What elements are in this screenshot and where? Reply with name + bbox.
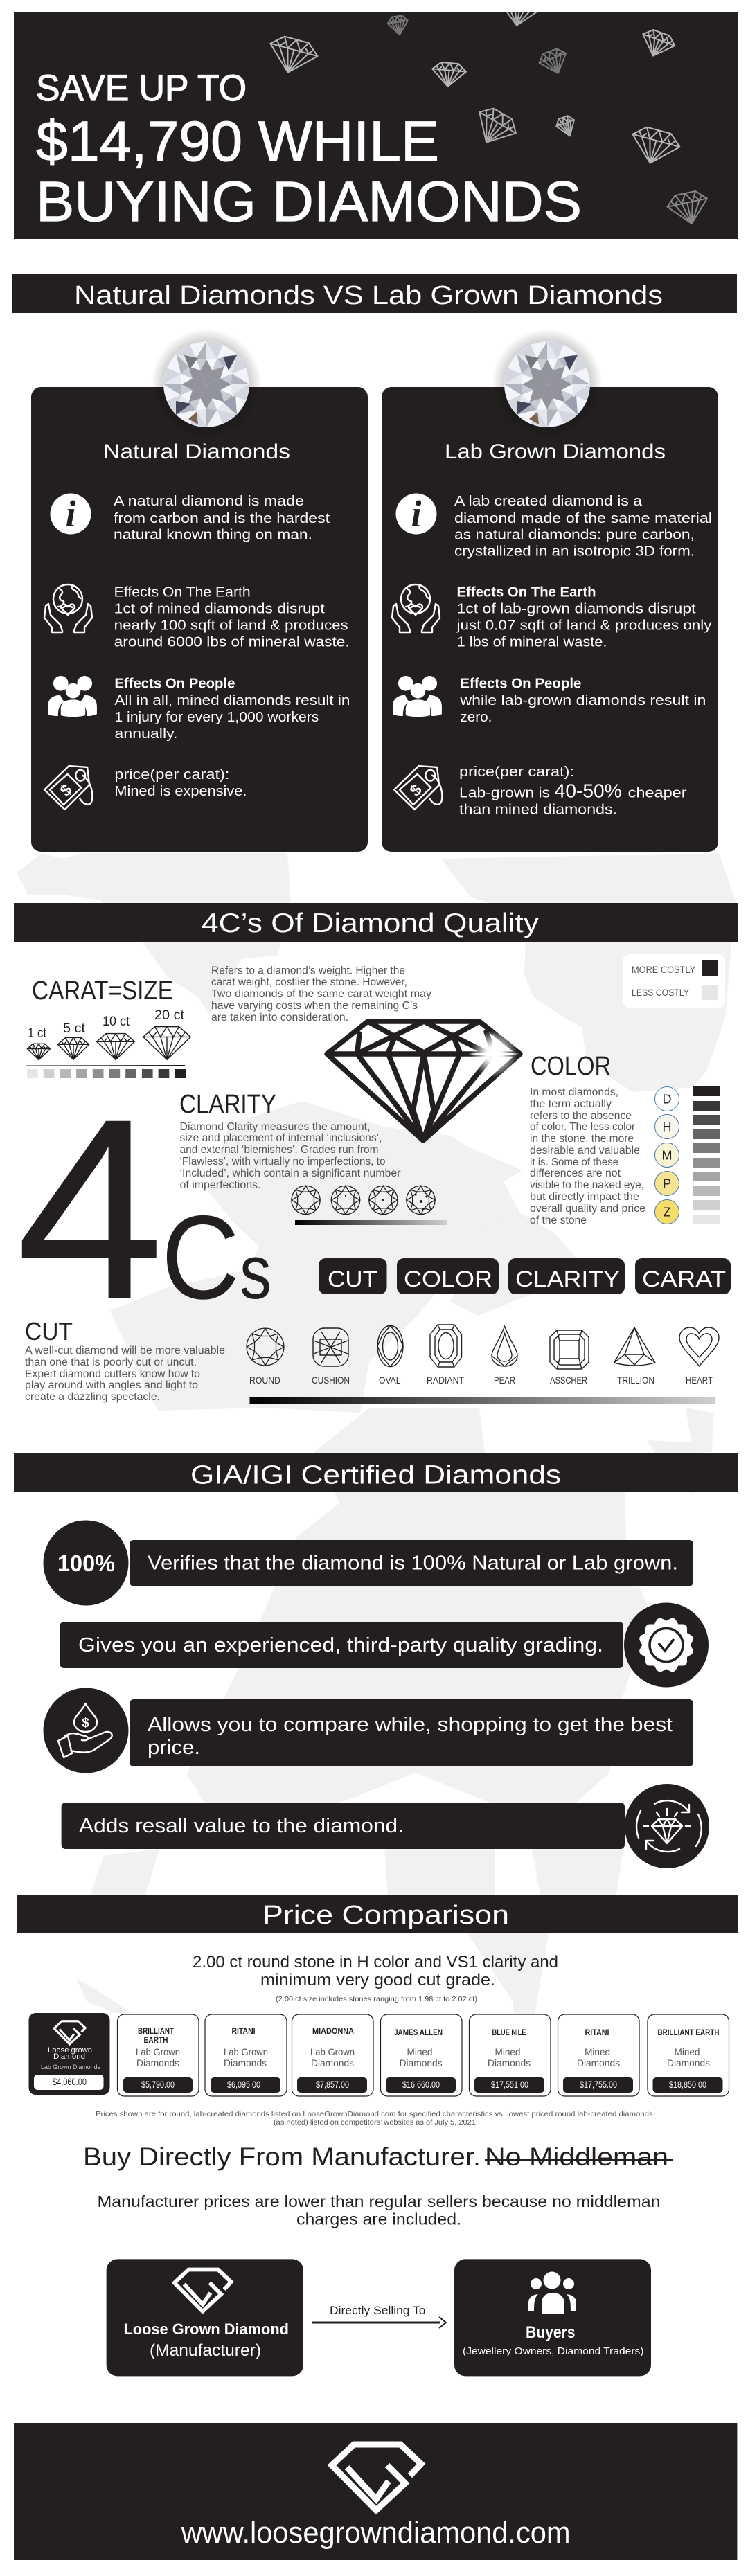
text: price natural: price(per carat): <box>114 767 229 782</box>
text: comparison subject <box>193 1953 558 2003</box>
clarity grade diamonds <box>292 1186 435 1215</box>
text: comparison subject: 2.00 ct round stone in H color and VS1 clarity and <box>193 1953 558 1971</box>
color grade letters <box>662 1093 672 1219</box>
carat block <box>26 976 190 1078</box>
carat size labels: 5 ct <box>63 1021 86 1036</box>
benefit row 4: Adds resall value to the diamond. <box>79 1815 404 1837</box>
title <box>36 68 582 233</box>
text: comparison subject: (2.00 ct size includes stones ranging from 1.98 ct to 2.02 ct) <box>276 1995 477 2003</box>
pills: four C labels: CUT <box>328 1267 377 1291</box>
text: price lab: price(per carat): <box>459 764 574 780</box>
price card: Brilliant Earth lab: BRILLIANT <box>138 2026 175 2036</box>
price card: Brilliant Earth mined: $18,850.00 <box>669 2079 706 2090</box>
text: people effects natural: 1 injury for every 1,000 workers <box>114 710 319 725</box>
background world map <box>17 853 736 2096</box>
benefit row 1: Verifies that the diamond is 100% Natural or Lab grown. <box>148 1553 678 1575</box>
pills: four C labels: CARAT <box>642 1267 726 1291</box>
benefit row 3 <box>43 1688 693 1773</box>
cut shape labels <box>249 1375 713 1386</box>
pills: four C labels <box>319 1258 731 1294</box>
icon: info: i <box>65 493 76 535</box>
icon: info right: i <box>411 493 422 535</box>
text: people effects lab <box>459 676 706 725</box>
text: lab definition: crystallized in an isotropic 3D form. <box>454 544 695 559</box>
cut shape labels: PEAR <box>494 1375 515 1386</box>
price card: Miadonna lab: Diamonds <box>311 2057 354 2068</box>
text: price natural: Mined is expensive. <box>114 784 247 799</box>
text: natural definition: from carbon and is the hardest <box>114 511 330 526</box>
text: earth effects lab: just 0.07 sqft of land & produces only <box>456 618 712 633</box>
heading: buy directly <box>83 2143 673 2171</box>
price card: Blue Nile mined: $17,551.00 <box>491 2079 528 2090</box>
text: earth effects natural: Effects On The Earth <box>114 585 251 600</box>
sparkle <box>468 1030 519 1077</box>
clarity heading: CLARITY <box>179 1090 276 1119</box>
large diamond illustration <box>327 1021 520 1141</box>
section heading: GIA IGI: GIA/IGI Certified Diamonds <box>190 1461 561 1490</box>
cut shape labels: ASSCHER <box>550 1375 587 1386</box>
icon: info <box>50 493 91 535</box>
clarity block <box>179 1090 447 1225</box>
icon: price tag right <box>394 766 442 810</box>
big 4Cs lettering: s <box>240 1230 271 1315</box>
big 4Cs lettering <box>16 1065 271 1352</box>
header banner <box>14 0 738 239</box>
text: color description: visible to the naked eye, <box>530 1179 644 1191</box>
text: clarity description <box>180 1121 400 1191</box>
color grade letters: H <box>662 1120 672 1134</box>
text: price lab: than mined diamonds. <box>459 802 617 817</box>
price card: Brilliant Earth lab: EARTH <box>144 2035 168 2045</box>
text: color description: but directly impact the <box>530 1191 639 1203</box>
decorative falling diamonds <box>265 0 711 228</box>
icon: price tag <box>44 766 92 810</box>
legend: cost: MORE COSTLY <box>632 964 696 975</box>
price card: Brilliant Earth mined: BRILLIANT EARTH <box>658 2028 719 2037</box>
price card: Brilliant Earth mined: Diamonds <box>667 2057 710 2068</box>
title: BUYING DIAMONDS <box>36 170 582 233</box>
text: earth effects lab: 1 lbs of mineral waste. <box>457 635 607 650</box>
price card: Ritani lab: Lab Grown <box>224 2046 268 2057</box>
price card: Ritani mined: Mined <box>585 2046 610 2057</box>
price card: James Allen mined: JAMES ALLEN <box>394 2028 443 2037</box>
text: clarity description: of imperfections. <box>180 1179 260 1191</box>
price card: Ritani mined <box>558 2014 639 2096</box>
icon: hand with money drop <box>43 1688 129 1773</box>
text: people effects natural: All in all, mined diamonds result in <box>114 693 350 708</box>
price card: Brilliant Earth lab: Diamonds <box>136 2057 179 2068</box>
text: cut description: A well-cut diamond will be more valuable <box>25 1345 225 1357</box>
price card: Ritani mined: $17,755.00 <box>580 2079 617 2090</box>
panel: lab grown diamonds <box>382 329 718 852</box>
text: people effects lab: while lab-grown diamonds result in <box>459 693 706 708</box>
cut shapes <box>247 1325 719 1369</box>
carat size labels: 20 ct <box>154 1008 185 1023</box>
icon: people right <box>393 676 442 717</box>
panel: buyers: (Jewellery Owners, Diamond Traders) <box>463 2345 644 2357</box>
text: price lab <box>459 764 687 817</box>
text: color description: overall quality and price <box>530 1203 645 1215</box>
text: carat description: Refers to a diamond’s weight. Higher the <box>211 965 405 977</box>
benefit row 3: price. <box>148 1737 200 1759</box>
benefit row 2 <box>60 1602 709 1687</box>
text: color description: of the stone <box>530 1215 587 1226</box>
website url: www.loosegrowndiamond.com <box>181 2516 571 2550</box>
text: earth effects lab <box>456 585 712 650</box>
text: earth effects lab: Effects On The Earth <box>457 585 596 600</box>
text: color description: In most diamonds, <box>530 1086 618 1098</box>
text: people effects natural: Effects On People <box>114 676 235 691</box>
icon: earth in hands right <box>392 584 440 632</box>
section heading: natural vs lab: Natural Diamonds VS Lab Grown Diamonds <box>74 281 663 310</box>
panel: natural diamonds <box>31 329 368 852</box>
text: price lab: cheaper <box>628 786 687 801</box>
footnote: Prices shown are for round, lab-created diamonds listed on LooseGrownDiamond.com for specified characteristics vs. lowest priced round lab-created diamonds <box>96 2111 653 2118</box>
cut shape labels: ROUND <box>249 1375 280 1386</box>
price card: Miadonna lab: $7,857.00 <box>316 2079 349 2090</box>
icon: hand with money drop: $ <box>82 1716 89 1730</box>
text: color description: desirable and valuable <box>530 1145 640 1156</box>
benefit row 2: Gives you an experienced, third-party quality grading. <box>78 1634 603 1656</box>
text: carat description <box>211 965 431 1023</box>
text: people effects lab: zero. <box>460 710 492 725</box>
icon: buyers group <box>528 2271 576 2314</box>
benefit row 1 <box>43 1521 693 1605</box>
title: SAVE UP TO <box>36 68 247 109</box>
cut shape labels: TRILLION <box>617 1375 654 1386</box>
cut shape labels: RADIANT <box>427 1375 464 1386</box>
carat heading: CARAT=SIZE <box>32 976 173 1005</box>
carat size labels: 1 ct <box>28 1026 47 1041</box>
cut block <box>25 1317 719 1404</box>
panel: manufacturer <box>107 2259 303 2376</box>
color grade letters: D <box>662 1093 672 1107</box>
big 4Cs lettering: 4 <box>16 1065 164 1352</box>
section heading: 4Cs <box>14 903 738 942</box>
text: manufacturer explanation <box>97 2192 661 2228</box>
text: color description: in the stone, the more <box>530 1133 634 1145</box>
text: people effects lab: Effects On People <box>460 676 581 691</box>
price card: Ritani lab <box>205 2014 287 2096</box>
text: comparison subject: minimum very good cut grade. <box>260 1971 495 1989</box>
price card: Ritani lab: Diamonds <box>224 2057 267 2068</box>
heading: buy directly: Buy Directly From Manufacturer. <box>83 2143 481 2171</box>
text: price lab: Lab-grown is <box>459 786 550 801</box>
text: lab definition <box>454 494 712 559</box>
text: natural definition: A natural diamond is made <box>114 494 304 509</box>
price card: Blue Nile mined: Diamonds <box>488 2057 531 2068</box>
text: cut description: create a dazzling spectacle. <box>25 1391 160 1403</box>
heading: buy directly: No Middleman <box>485 2143 668 2171</box>
price card: James Allen mined <box>381 2014 462 2096</box>
logo small <box>54 2021 85 2044</box>
icon: people <box>48 676 97 717</box>
price card: Loose Grown Diamond: $4,060.00 <box>53 2076 87 2087</box>
text: color description: refers to the absence <box>530 1110 632 1122</box>
price card: Ritani mined: Diamonds <box>577 2057 620 2068</box>
section heading: natural vs lab <box>12 274 737 313</box>
text: color description: differences are not <box>530 1168 621 1179</box>
text: clarity description: ‘Flawless’, with virtually no imperfections, to <box>180 1156 385 1168</box>
text: cut description: play around with angles and light to <box>25 1379 198 1391</box>
color block <box>530 1052 720 1226</box>
cut shape labels: CUSHION <box>312 1375 350 1386</box>
benefit row 3: Allows you to compare while, shopping to get the best <box>148 1714 673 1736</box>
text: carat description: are taken into consideration. <box>211 1012 348 1023</box>
text: earth effects natural <box>114 585 350 650</box>
arrow: directly selling to <box>312 2304 446 2328</box>
price card: Miadonna lab: Lab Grown <box>310 2046 355 2057</box>
text: lab definition: as natural diamonds: pure carbon, <box>454 528 695 543</box>
panel: manufacturer: (Manufacturer) <box>150 2341 261 2360</box>
text: carat description: have varying costs when the remaining C’s <box>211 1000 418 1012</box>
panel: buyers <box>454 2259 651 2376</box>
icon: diamond with circular arrows <box>625 1784 709 1868</box>
arrow: directly selling to: Directly Selling To <box>330 2304 425 2317</box>
price card: Loose Grown Diamond: Loose grown <box>48 2046 92 2055</box>
diamond photo left <box>151 329 262 440</box>
color cost bars <box>693 1086 720 1224</box>
price card: Ritani lab: RITANI <box>231 2026 255 2036</box>
cut shape labels: HEART <box>686 1375 713 1386</box>
footnote <box>96 2111 653 2127</box>
text: natural definition <box>114 494 330 543</box>
text: color description: the term actually <box>530 1098 612 1110</box>
color grade letters: Z <box>664 1205 670 1219</box>
legend: cost <box>623 954 725 1008</box>
color grade circles <box>655 1087 679 1224</box>
section heading: price comparison <box>17 1895 738 1933</box>
icon: info right <box>396 493 436 535</box>
price card: James Allen mined: Diamonds <box>400 2057 443 2068</box>
text: cut description: Expert diamond cutters know how to <box>25 1368 200 1380</box>
price card: Brilliant Earth mined: Mined <box>675 2046 700 2057</box>
cut heading: CUT <box>25 1317 73 1345</box>
text: lab definition: diamond made of the same material <box>454 511 712 526</box>
section heading: 4Cs: 4C’s Of Diamond Quality <box>202 909 540 938</box>
icon: earth in hands <box>44 584 92 632</box>
price card: Loose Grown Diamond: Diamond <box>53 2052 85 2061</box>
price card: Miadonna lab <box>292 2014 373 2096</box>
price card: Miadonna lab: MIADONNA <box>312 2026 354 2036</box>
text: carat description: Two diamonds of the same carat weight may <box>211 988 431 1000</box>
text: earth effects lab: 1ct of lab-grown diamonds disrupt <box>457 601 696 616</box>
title: $14,790 WHILE <box>36 110 439 173</box>
text: price lab: 40-50% <box>555 780 622 802</box>
text: color description <box>530 1086 645 1226</box>
price card: Loose Grown Diamond <box>29 2013 109 2095</box>
benefit row 4 <box>62 1784 709 1868</box>
color grade letters: P <box>663 1177 671 1191</box>
price card: Ritani lab: $6,095.00 <box>227 2079 260 2090</box>
price card: Blue Nile mined <box>470 2014 551 2096</box>
color heading: COLOR <box>531 1052 611 1081</box>
text: clarity description: Diamond Clarity measures the amount, <box>180 1121 370 1133</box>
pills: four C labels: CLARITY <box>515 1267 620 1291</box>
panel: manufacturer: Loose Grown Diamond <box>123 2320 289 2338</box>
text: clarity description: size and placement of internal ‘inclusions’, <box>180 1132 382 1144</box>
text: carat description: carat weight, costlier the stone. However, <box>211 976 407 988</box>
legend: cost: LESS COSTLY <box>632 987 690 998</box>
carat size diamonds <box>27 1027 190 1060</box>
text: earth effects natural: around 6000 lbs of mineral waste. <box>114 635 350 650</box>
text: earth effects natural: nearly 100 sqft of land & produces <box>114 618 348 633</box>
price card: Brilliant Earth lab: $5,790.00 <box>141 2079 175 2090</box>
text: natural definition: natural known thing on man. <box>114 528 312 543</box>
color grade letters: M <box>662 1148 672 1162</box>
cut shape labels: OVAL <box>379 1375 401 1386</box>
text: cut description: than one that is poorly cut or uncut. <box>25 1357 197 1368</box>
text: people effects natural: annually. <box>114 726 177 742</box>
card title left: Natural Diamonds <box>103 440 290 463</box>
badge: 100% <box>43 1521 129 1605</box>
card title right: Lab Grown Diamonds <box>445 440 666 463</box>
badge: 100%: 100% <box>57 1550 115 1576</box>
price card: Blue Nile mined: Mined <box>495 2046 521 2057</box>
text: clarity description: and external ‘blemishes’. Grades run from <box>180 1144 378 1156</box>
big 4Cs lettering: C <box>161 1191 240 1324</box>
text: lab definition: A lab created diamond is a <box>454 494 643 509</box>
footer banner <box>14 2423 737 2560</box>
price card: Ritani mined: RITANI <box>585 2028 609 2037</box>
text: cut description <box>25 1345 225 1403</box>
carat cost scale <box>27 1069 186 1078</box>
text: earth effects natural: 1ct of mined diamonds disrupt <box>114 601 325 616</box>
footnote: (as noted) listed on competitors’ websites as of July 5, 2021. <box>274 2119 478 2127</box>
price card: Brilliant Earth mined <box>648 2014 729 2096</box>
text: manufacturer explanation: charges are included. <box>296 2210 461 2228</box>
section heading: price comparison: Price Comparison <box>262 1901 509 1930</box>
text: color description: it is. Some of these <box>530 1156 618 1168</box>
panel: buyers: Buyers <box>526 2323 575 2342</box>
price card: Brilliant Earth lab: Lab Grown <box>136 2046 180 2057</box>
text: manufacturer explanation: Manufacturer prices are lower than regular sellers because no middleman <box>97 2192 661 2210</box>
pills: four C labels: COLOR <box>404 1267 492 1291</box>
price card: Brilliant Earth lab <box>118 2014 199 2096</box>
carat size labels: 10 ct <box>103 1014 130 1029</box>
carat size labels <box>28 1008 185 1041</box>
diamond photo right <box>492 329 603 440</box>
section heading: GIA IGI <box>14 1453 738 1492</box>
logo medium <box>175 2269 231 2311</box>
logo large <box>332 2444 421 2510</box>
icon: quality badge <box>624 1602 709 1687</box>
text: color description: of color. The less color <box>530 1121 635 1133</box>
price card: James Allen mined: Mined <box>407 2046 432 2057</box>
text: price natural <box>114 767 247 799</box>
price card: Loose Grown Diamond: Lab Grown Diamonds <box>41 2064 100 2071</box>
text: people effects natural <box>114 676 350 742</box>
price card: James Allen mined: $16,660.00 <box>402 2079 440 2090</box>
text: clarity description: ‘Included’, which contain a significant number <box>180 1168 400 1179</box>
price card: Blue Nile mined: BLUE NILE <box>492 2028 526 2037</box>
